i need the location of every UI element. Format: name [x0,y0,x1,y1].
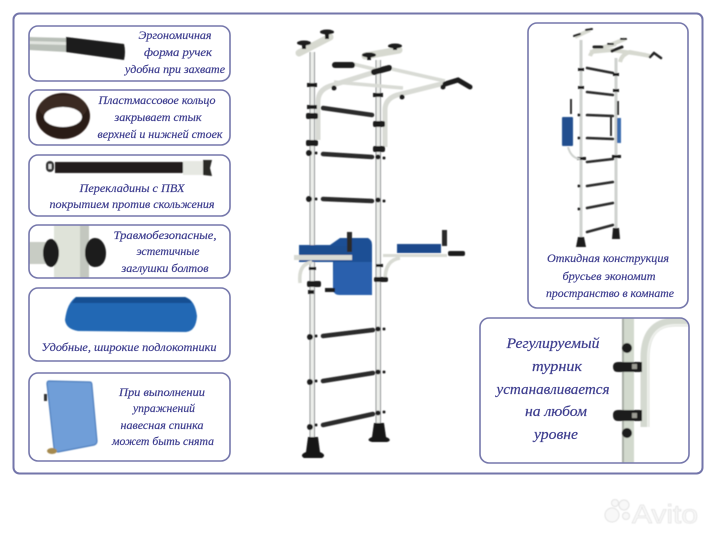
panel: plastic ring [29,90,230,145]
icon: blue armrest [65,297,197,332]
text: handles caption: удобна при захвате [124,64,225,76]
panel: folding bars [528,23,688,308]
watermark: Avito: Avito [632,499,698,529]
text: crossbars caption [50,183,214,211]
dip bars and padding [294,230,465,295]
illustration: pull-up bar clamps [613,318,690,463]
text: pull-up caption: устанавливается [494,382,610,398]
text: handles caption: Эргономичная [138,30,212,42]
text: bolt caps caption [114,230,217,275]
floor feet [302,423,390,458]
text: bolt caps caption: эстетичные [136,246,200,258]
text: folding caption [546,253,674,300]
text: pull-up caption: на любом [525,404,587,420]
text: pull-up caption: Регулируемый [505,336,600,352]
panel: ergonomic handles [29,26,230,81]
pull-up bar [318,64,445,147]
text: pull-up caption [494,336,610,443]
ladder rungs [323,108,373,425]
icon: handle grip [29,37,125,60]
wall brackets [299,37,399,56]
text: crossbars caption: покрытием против скольжения [50,199,214,211]
text: pull-up caption: турник [532,359,583,375]
text: ring caption: верхней и нижней стоек [98,128,223,141]
icon: bolt caps [29,225,106,278]
panel: armrests [29,288,230,361]
icon: plastic ring [36,93,90,139]
text: folding caption: Откидная конструкция [547,253,669,265]
icon: blue backrest [44,381,97,454]
icon: crossbar [46,160,212,176]
text: bolt caps caption: Травмобезопасные, [114,230,217,242]
text: ring caption: закрывает стык [113,112,202,124]
text: bolt caps caption: заглушки болтов [120,263,208,275]
text: pull-up caption: уровне [532,427,578,443]
text: crossbars caption: Перекладины с ПВХ [78,183,186,195]
panel: adjustable pull-up bar [480,318,690,463]
main wall bars illustration [294,30,470,458]
text: folding caption: брусьев экономит [562,271,656,283]
text: backrest caption [111,387,214,448]
text: handles caption [124,30,225,76]
text: backrest caption: навесная спинка [120,420,204,432]
text: folding caption: пространство в комнате [546,288,674,300]
text: handles caption: форма ручек [144,47,213,59]
panel: PVC crossbars [29,155,230,216]
text: ring caption [97,95,223,141]
left and right posts [312,52,378,440]
text: backrest caption: упражнений [132,402,195,415]
panel: removable backrest [29,373,230,461]
illustration: folded wall bars [562,29,661,247]
text: backrest caption: При выполнении [118,387,205,399]
panel: bolt caps [29,225,230,278]
text: ring caption: Пластмассовое кольцо [97,95,216,107]
text: armrests caption: Удобные, широкие подлокотники [42,342,217,354]
watermark: Avito [605,499,698,529]
text: backrest caption: может быть снята [111,436,214,448]
